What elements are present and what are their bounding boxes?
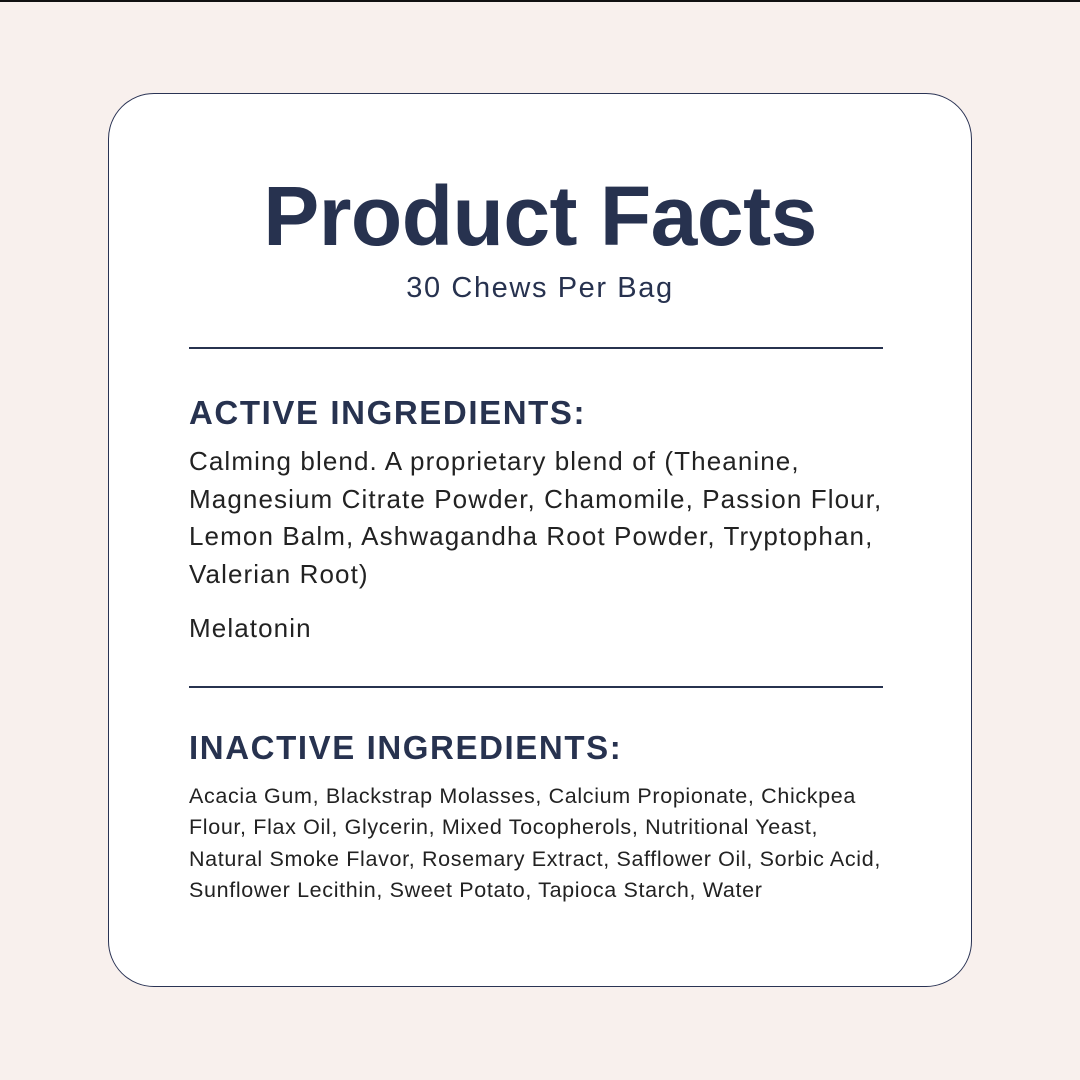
text: inactive ingredients list: Acacia Gum, Blackstrap Molasses, Calcium Propionate, Chickpea (189, 784, 856, 808)
text: inactive ingredients list: Natural Smoke Flavor, Rosemary Extract, Safflower Oil, Sorbic Acid, (189, 847, 881, 871)
text: inactive ingredients list: Flour, Flax Oil, Glycerin, Mixed Tocopherols, Nutritional Yeast, (189, 815, 818, 839)
text: inactive ingredients list (189, 784, 881, 902)
card panel (108, 93, 972, 987)
subtitle: 30 Chews Per Bag (406, 272, 674, 304)
heading: active ingredients: ACTIVE INGREDIENTS: (189, 394, 586, 431)
text: melatonin: Melatonin (189, 613, 312, 643)
text: active ingredients list: Lemon Balm, Ashwagandha Root Powder, Tryptophan, (189, 521, 873, 551)
text: active ingredients list: Magnesium Citrate Powder, Chamomile, Passion Flour, (189, 484, 882, 514)
text: active ingredients list: Calming blend. A proprietary blend of (Theanine, (189, 446, 800, 476)
title: Product Facts (263, 169, 817, 263)
text: active ingredients list (189, 446, 882, 588)
heading: inactive ingredients: INACTIVE INGREDIENTS: (189, 729, 622, 766)
text: inactive ingredients list: Sunflower Lecithin, Sweet Potato, Tapioca Starch, Water (189, 878, 763, 902)
text: active ingredients list: Valerian Root) (189, 558, 369, 588)
